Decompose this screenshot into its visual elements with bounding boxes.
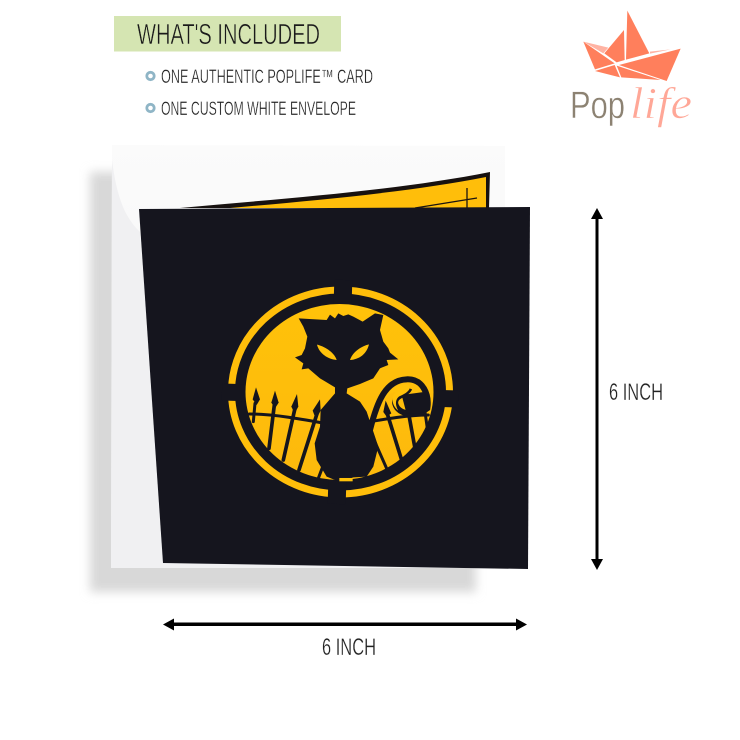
envelope shadow (90, 172, 476, 592)
cat eyes (317, 345, 337, 360)
list item: white envelope (147, 99, 356, 120)
moon (246, 304, 434, 480)
product photo: card and envelope (90, 145, 530, 592)
icon: origami boat (583, 11, 681, 81)
arrow: horizontal dimension (163, 618, 527, 630)
panel: what's included (114, 16, 373, 120)
tail highlight (384, 384, 410, 411)
list item: white envelope: ONE CUSTOM WHITE ENVELOPE (161, 99, 356, 120)
envelope (111, 145, 505, 568)
heading: what's included: WHAT'S INCLUDED (137, 19, 320, 51)
cat and fence silhouette (249, 313, 431, 482)
heading: what's included (114, 16, 341, 52)
cat (295, 313, 398, 482)
foot gap (339, 478, 353, 481)
fence (249, 403, 428, 478)
outer ring (219, 277, 462, 507)
list item: poplife card (147, 67, 373, 88)
logo: poplife (570, 11, 692, 128)
label: height 6 inch: 6 INCH (609, 379, 663, 406)
label: width 6 inch: 6 INCH (322, 634, 376, 661)
tail (370, 379, 428, 430)
cat emblem (219, 277, 462, 507)
inner card page (180, 172, 490, 208)
wordmark: life: life (630, 79, 692, 128)
wordmark: pop: Pop (570, 85, 625, 127)
arrow: vertical dimension (591, 208, 603, 570)
front card (139, 207, 530, 569)
list item: poplife card: ONE AUTHENTIC POPLIFE™ CARD (161, 67, 373, 88)
